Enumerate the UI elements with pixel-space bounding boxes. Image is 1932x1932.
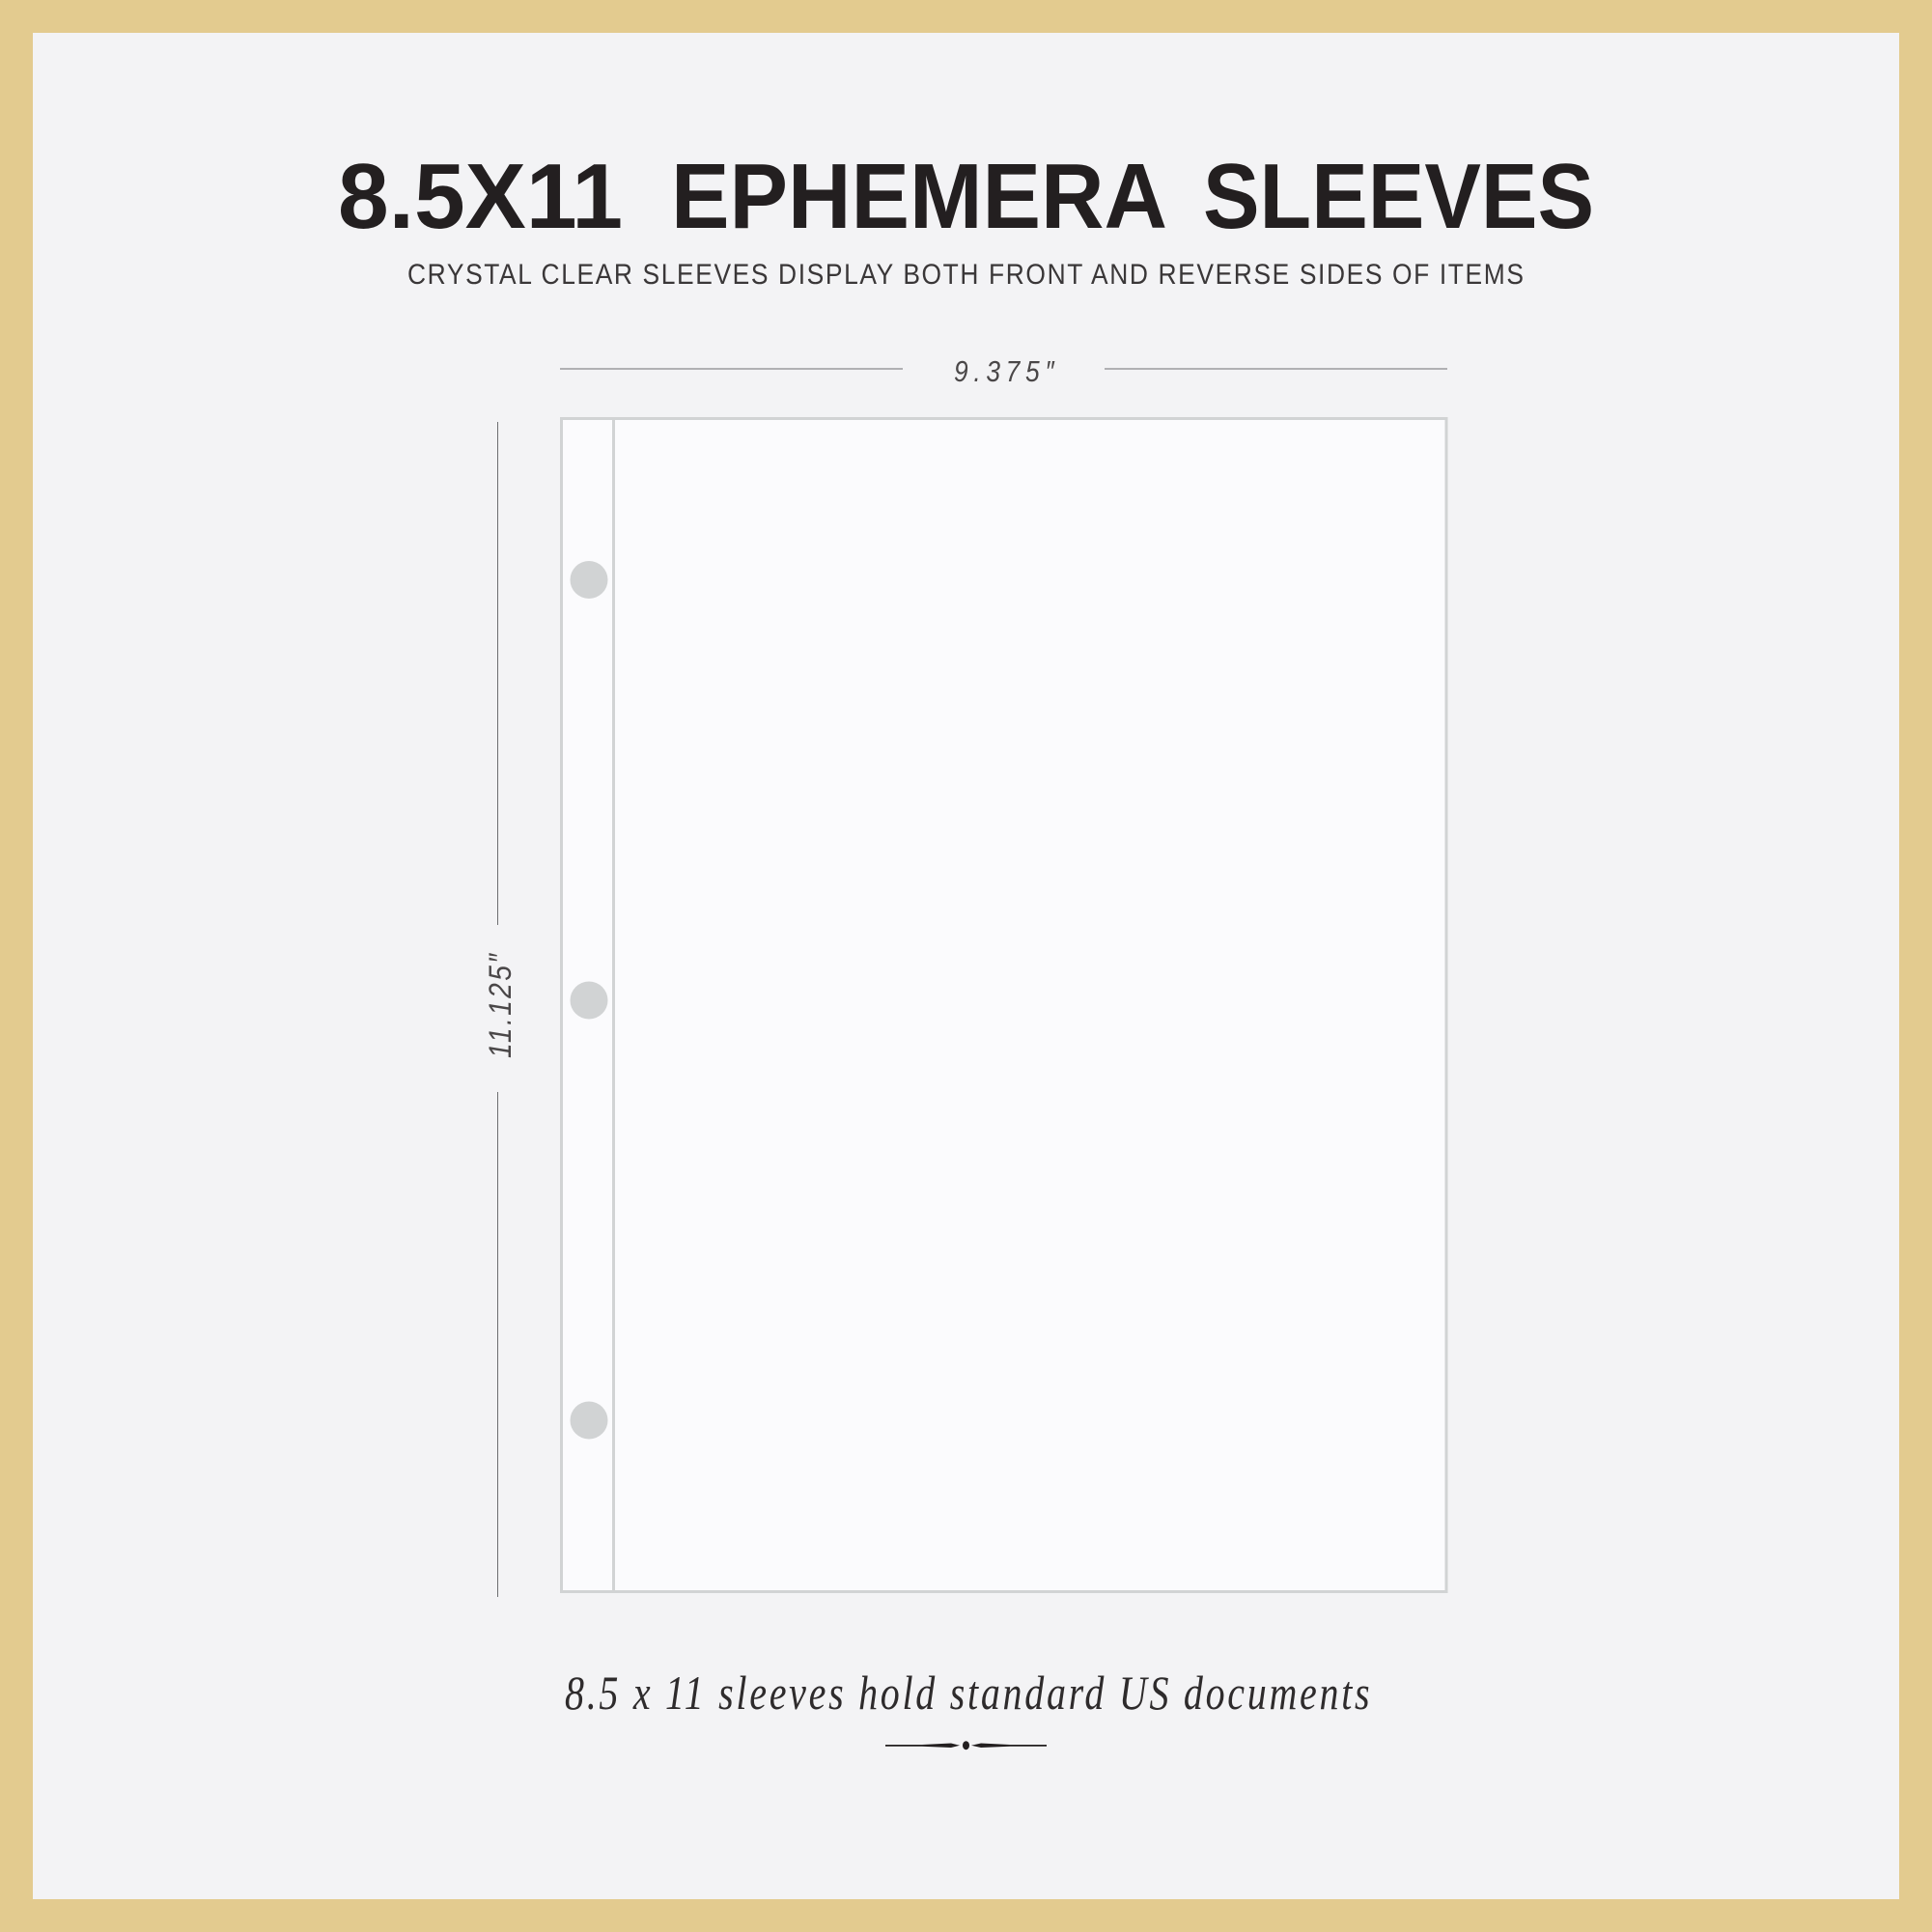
- width dimension: 9.375 inches: 9.375″: [954, 355, 1054, 389]
- title: SLEEVES: [1203, 145, 1594, 248]
- title: 8.5X11: [338, 145, 623, 248]
- title: [338, 145, 1594, 248]
- height dimension: 11.125 inches: 11.125″: [484, 953, 518, 1058]
- punch hole top: [570, 561, 608, 599]
- decorative ornament under caption: [885, 1741, 1047, 1750]
- sleeve diagram: [562, 418, 1446, 1592]
- sleeve body: [562, 419, 1446, 1591]
- punch hole bottom: [570, 1402, 608, 1439]
- subtitle: CRYSTAL CLEAR SLEEVES DISPLAY BOTH FRONT AND REVERSE SIDES OF ITEMS: [407, 257, 1524, 290]
- title: EPHEMERA: [671, 145, 1167, 248]
- punch hole middle: [570, 981, 608, 1020]
- caption: 8.5 x 11 sleeves hold standard US documents: [565, 1666, 1370, 1720]
- binding strip divider: [612, 418, 615, 1592]
